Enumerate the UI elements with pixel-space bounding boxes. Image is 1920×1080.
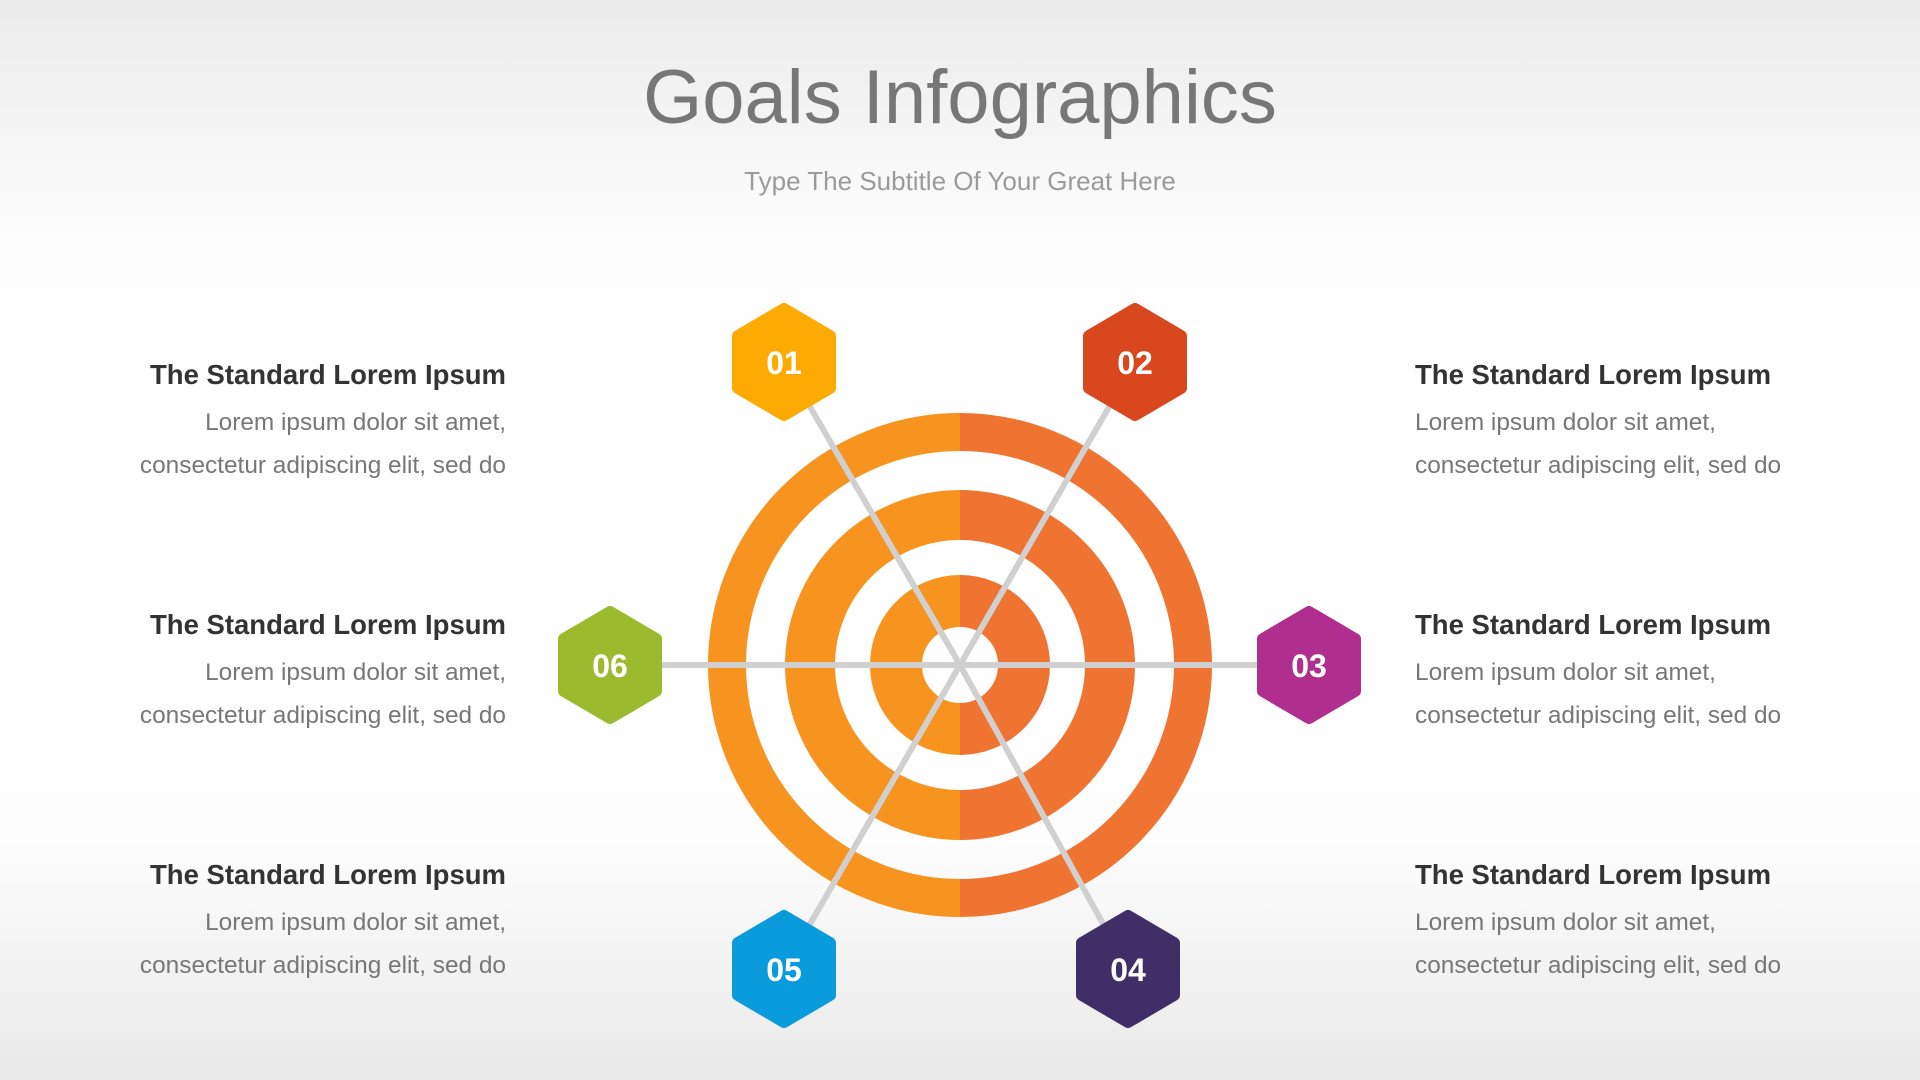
text block 04: Lorem ipsum dolor sit amet, <box>1415 909 1716 936</box>
text block 06 <box>140 609 506 729</box>
text block 04: The Standard Lorem Ipsum <box>1415 859 1771 890</box>
hexagon 01 <box>738 309 830 415</box>
text block 06: consectetur adipiscing elit, sed do <box>140 702 506 729</box>
text block 02: The Standard Lorem Ipsum <box>1415 359 1771 390</box>
text block 04: consectetur adipiscing elit, sed do <box>1415 952 1781 979</box>
title: Goals Infographics <box>643 55 1277 140</box>
text block 03: The Standard Lorem Ipsum <box>1415 609 1771 640</box>
hexagon 02 <box>1089 309 1181 415</box>
text block 01: The Standard Lorem Ipsum <box>150 359 506 390</box>
hexagon 03: 03 <box>1291 648 1327 684</box>
text block 01: consectetur adipiscing elit, sed do <box>140 452 506 479</box>
text block 05 <box>140 859 506 979</box>
connector lines <box>610 362 1309 969</box>
text block 04 <box>1415 859 1781 979</box>
text block 05: Lorem ipsum dolor sit amet, <box>205 909 506 936</box>
hexagon 06: 06 <box>592 648 628 684</box>
hexagon 05: 05 <box>766 952 802 988</box>
text block 05: The Standard Lorem Ipsum <box>150 859 506 890</box>
text block 02: consectetur adipiscing elit, sed do <box>1415 452 1781 479</box>
text block 06: The Standard Lorem Ipsum <box>150 609 506 640</box>
hexagon 01: 01 <box>766 345 802 381</box>
text block 03: consectetur adipiscing elit, sed do <box>1415 702 1781 729</box>
text block 03 <box>1415 609 1781 729</box>
text block 02 <box>1415 359 1781 479</box>
hexagon 03 <box>1263 612 1355 718</box>
target diagram <box>558 302 1361 1028</box>
text block 03: Lorem ipsum dolor sit amet, <box>1415 659 1716 686</box>
target rings <box>727 432 1193 898</box>
text block 06: Lorem ipsum dolor sit amet, <box>205 659 506 686</box>
hexagon 06 <box>564 612 656 718</box>
text block 01 <box>140 359 506 479</box>
hexagon 05 <box>738 916 830 1022</box>
subtitle: Type The Subtitle Of Your Great Here <box>744 166 1176 196</box>
hexagon 04 <box>1082 916 1174 1022</box>
hexagon 04: 04 <box>1110 952 1146 988</box>
text block 05: consectetur adipiscing elit, sed do <box>140 952 506 979</box>
text block 02: Lorem ipsum dolor sit amet, <box>1415 409 1716 436</box>
text block 01: Lorem ipsum dolor sit amet, <box>205 409 506 436</box>
hexagon 02: 02 <box>1117 345 1153 381</box>
